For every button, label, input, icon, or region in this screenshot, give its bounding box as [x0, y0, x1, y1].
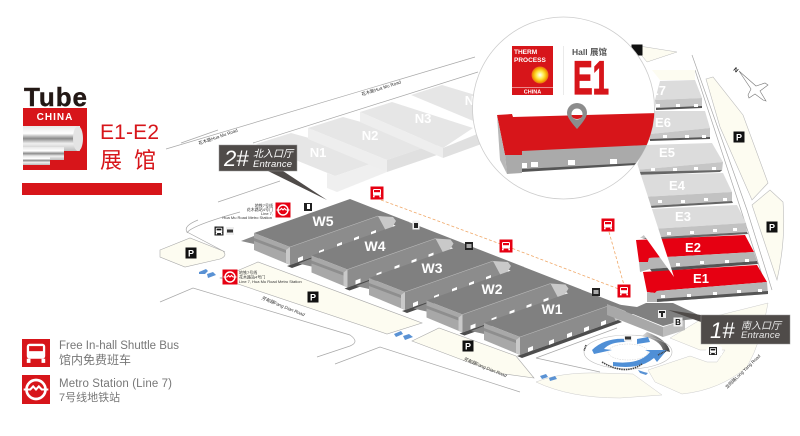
hall W3: W3: [422, 260, 443, 276]
parking area: south-east: [752, 190, 784, 280]
hall N2: [308, 117, 437, 172]
2# entrance callout: Entrance: [253, 159, 292, 170]
metro station west: [222, 269, 302, 284]
shuttle route dashes: [381, 200, 624, 291]
hall N2: N2: [362, 128, 378, 143]
2# entrance callout: 2#: [223, 146, 249, 171]
parking icons: P: [769, 222, 775, 232]
magnifier lens: [472, 17, 660, 199]
hall W1: [471, 289, 639, 358]
1# entrance callout: [668, 310, 790, 344]
road labels: 花木路Hua Mu Road: [360, 78, 402, 98]
metro station north: 地铁7号线: [255, 202, 273, 208]
metro station north: Line 7,: [261, 211, 273, 216]
legend: metro station: [22, 375, 172, 404]
parking icons: P: [188, 248, 194, 258]
metro station west: Line 7, Hua Mu Road Metro Station: [239, 279, 302, 284]
hall E5: E5: [659, 145, 675, 160]
south-east lawn: [648, 303, 768, 394]
small facility icons: B: [675, 318, 681, 327]
metro station west: 花木路站4号门: [239, 274, 265, 280]
hall E4: E4: [669, 178, 686, 193]
legend: shuttle bus: [22, 339, 179, 367]
blue traffic arrows: [199, 269, 648, 381]
hall E6: [640, 111, 710, 141]
parking area: Fang Dian Road south: [412, 328, 534, 378]
hall E1 big label: E1: [573, 51, 609, 104]
parking icons: P: [465, 342, 471, 352]
Tube China logo: Tube: [24, 82, 87, 112]
legend: shuttle bus: 馆内免费班车: [59, 352, 131, 367]
legend: shuttle bus: Free In-hall Shuttle Bus: [59, 340, 179, 352]
1# entrance callout: 南入口厅: [741, 320, 783, 332]
south lawn: [536, 373, 662, 398]
hall E3: E3: [675, 209, 691, 224]
metro station north: Hua Mu Road Metro Station: [222, 215, 272, 220]
2# entrance callout: 北入口厅: [253, 148, 295, 160]
hall E4: [638, 173, 733, 208]
E1-E2 heading: E1-E2: [100, 121, 159, 144]
road labels: [197, 78, 762, 390]
hall W1: W1: [542, 301, 563, 317]
Therm Process logo: PROCESS: [514, 57, 546, 64]
metro station north: [222, 202, 290, 220]
2# entrance callout: [219, 145, 327, 200]
metro station north: 花木路站4号门: [247, 206, 273, 212]
hall W5: W5: [312, 213, 334, 229]
Tube China logo: [23, 82, 87, 170]
hall W5: [241, 199, 409, 268]
compass: north plane: [732, 67, 768, 101]
hall W2: W2: [482, 281, 503, 297]
hall N1: [256, 133, 387, 192]
Therm Process logo: THERM: [514, 49, 537, 56]
compass: north plane: N: [732, 67, 739, 74]
hall W2: [414, 266, 582, 336]
hall W4: [298, 222, 466, 290]
hall E2: [636, 235, 758, 272]
parking area: north-east: [633, 45, 677, 62]
parking icons: P: [736, 132, 742, 142]
hall E1: E1: [693, 271, 709, 286]
hall W4: W4: [364, 238, 386, 254]
hall N3: [360, 102, 487, 158]
hall E2: E2: [685, 240, 701, 255]
pavilion heading: 展馆: [100, 148, 168, 173]
road labels: 芳甸路Fang Dian Road: [261, 295, 306, 317]
pin marker: [567, 103, 587, 129]
hall N3: N3: [415, 111, 431, 126]
south entrance concourse: [607, 303, 705, 352]
road labels: 龙阳路Long Yang Road: [724, 353, 762, 390]
hall N1: N1: [310, 145, 326, 160]
roads: [160, 55, 772, 392]
hall caption: Hall 展馆: [572, 47, 607, 57]
parking area: west: [160, 238, 225, 267]
hall E5: [635, 143, 723, 175]
Therm Process logo: CHINA: [524, 90, 541, 96]
hall E3: [640, 205, 748, 240]
parking area: above E7: [652, 70, 695, 80]
hall N4: N4: [465, 93, 482, 108]
Therm Process logo: [512, 46, 553, 96]
hall E7: E7: [650, 83, 666, 98]
legend: metro station: 7号线地铁站: [59, 390, 120, 404]
hall E1: [643, 265, 768, 302]
metro station west: 地铁7号线: [239, 269, 257, 275]
circular drive: [584, 335, 672, 370]
hall W3: [356, 244, 524, 313]
red bar: [22, 183, 162, 195]
Tube China logo: CHINA: [37, 112, 73, 123]
shuttle bus stops: [370, 186, 630, 298]
hall E7: [650, 80, 702, 110]
legend: metro station: Metro Station (Line 7): [59, 378, 172, 390]
magnifier callout tail: [610, 163, 674, 277]
parking icons: [186, 44, 778, 352]
parking area: east: [706, 77, 768, 200]
hall E6: E6: [655, 115, 671, 130]
hall N4: [411, 85, 525, 130]
road labels: 芳甸路Fang Dian Road: [463, 356, 508, 378]
parking area: Fang Dian Road north: [220, 262, 422, 334]
road labels: 花木路Hua Mu Road: [197, 127, 239, 147]
1# entrance callout: Entrance: [741, 330, 780, 341]
small facility icons: [214, 203, 722, 359]
parking icons: P: [310, 292, 316, 302]
1# entrance callout: 1#: [710, 318, 735, 343]
